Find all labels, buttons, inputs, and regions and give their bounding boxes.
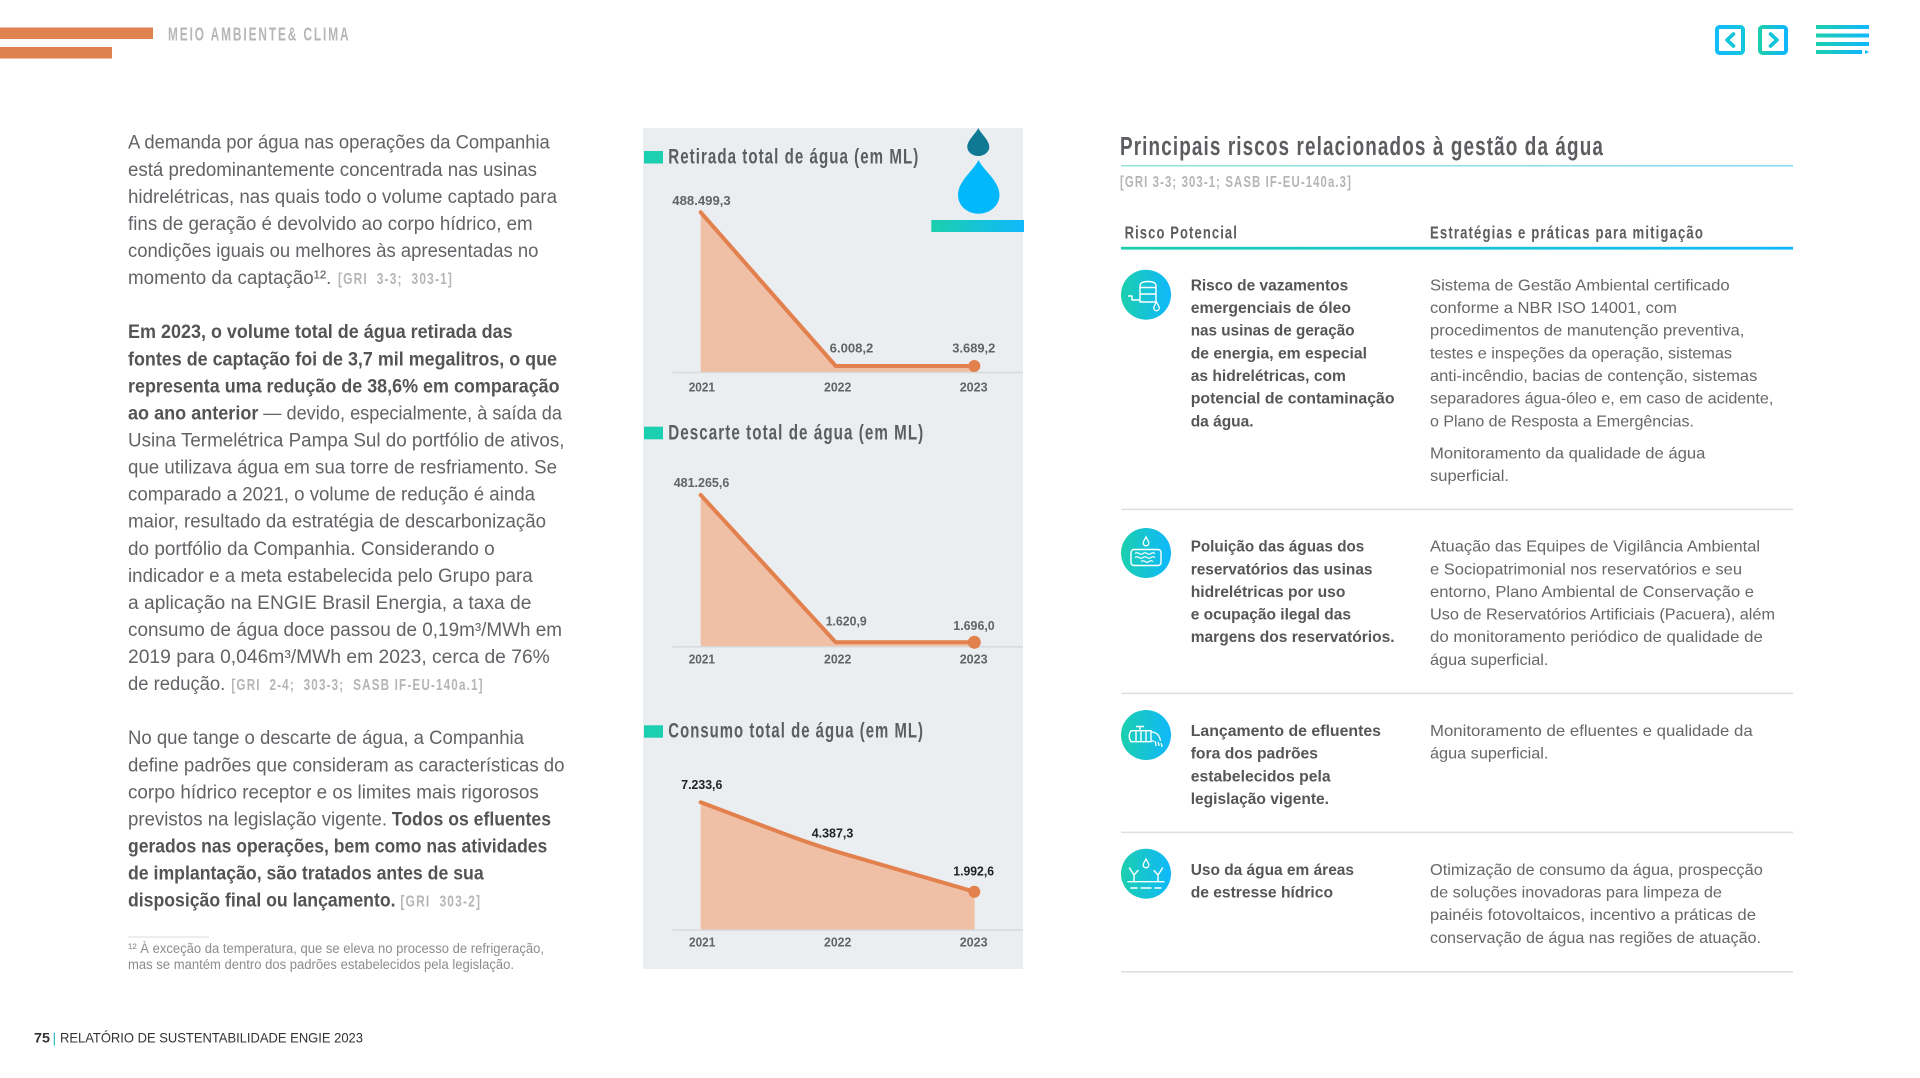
table row: vazamentos: procedimentos de manutenção preventiva,	[1430, 323, 1744, 340]
chart: descarte total de água: 481.265,6	[674, 475, 729, 490]
table row: estresse hídrico	[1121, 849, 1763, 947]
paragraph 2: [GRI 2-4; 303-3; SASB IF-EU-140a.1]	[231, 677, 484, 694]
table row: estresse hídrico: painéis fotovoltaicos, incentivo a práticas de	[1430, 907, 1756, 924]
chart: descarte total de água: 1.696,0	[953, 618, 995, 633]
paragraph 1: condições iguais ou melhores às apresentadas no	[128, 241, 538, 262]
paragraph 2: que utilizava água em sua torre de resfriamento. Se	[128, 458, 557, 478]
chart: descarte total de água: 1.620,9	[826, 614, 867, 629]
icon: polluted reservoir	[1121, 528, 1171, 578]
table row: poluição: e Sociopatrimonial nos reservatórios e seu	[1430, 561, 1742, 578]
table row: poluição: Atuação das Equipes de Vigilância Ambiental	[1430, 539, 1760, 556]
paragraph 3: gerados nas operações, bem como nas atividades	[128, 836, 547, 858]
paragraph 1: fins de geração é devolvido ao corpo hídrico, em	[128, 214, 533, 235]
chart: consumo total de água: Consumo total de água (em ML)	[668, 719, 924, 743]
paragraph 1: hidrelétricas, nas quais todo o volume captado para	[128, 187, 557, 208]
page footer: RELATÓRIO DE SUSTENTABILIDADE ENGIE 2023	[60, 1030, 363, 1046]
table row: vazamentos	[1121, 270, 1773, 485]
paragraph 2: consumo de água doce passou de 0,19m³/MWh em	[128, 620, 562, 641]
paragraph 2: do portfólio da Companhia. Considerando o	[128, 539, 495, 560]
table row: vazamentos: anti-incêndio, bacias de contenção, sistemas	[1430, 368, 1757, 385]
chart: consumo total de água: 2022	[824, 935, 851, 950]
table row: poluição: do monitoramento periódico de qualidade de	[1430, 629, 1763, 646]
paragraph 1: [GRI 3-3; 303-1]	[338, 271, 453, 288]
paragraph 3: [GRI 303-2]	[400, 894, 481, 911]
chart: consumo total de água: 2021	[689, 935, 715, 950]
chart: consumo total de água: 7.233,6	[681, 777, 722, 792]
paragraph 3: define padrões que consideram as características do	[128, 755, 564, 776]
paragraph 2: comparado a 2021, o volume de redução é ainda	[128, 485, 535, 506]
footnote: mas se mantém dentro dos padrões estabelecidos pela legislação.	[128, 957, 514, 972]
paragraph 2: ao ano anterior	[128, 403, 259, 424]
paragraph 3: No que tange o descarte de água, a Companhia	[128, 728, 524, 749]
table header: Estratégias e práticas para mitigação	[1430, 222, 1704, 242]
table row: efluentes	[1121, 710, 1753, 808]
table row: poluição: Poluição das águas dos	[1191, 539, 1364, 556]
table row: poluição: margens dos reservatórios.	[1191, 629, 1395, 646]
table row: estresse hídrico: Otimização de consumo da água, prospecção	[1430, 862, 1763, 879]
chart: retirada total de água: 2022	[824, 379, 851, 394]
page footer: 75	[34, 1030, 50, 1046]
table row: vazamentos: de energia, em especial	[1191, 345, 1367, 362]
icon: oil tank	[1121, 270, 1171, 320]
chart: retirada total de água	[644, 144, 1023, 394]
table row: estresse hídrico: de estresse hídrico	[1191, 885, 1333, 902]
paragraph 3: previstos na legislação vigente.	[128, 810, 387, 830]
table header: Risco Potencial	[1125, 222, 1238, 242]
chart: descarte total de água: Descarte total de água (em ML)	[668, 420, 924, 444]
chart: retirada total de água: 6.008,2	[830, 340, 873, 355]
table row: vazamentos: Sistema de Gestão Ambiental certificado	[1430, 277, 1730, 294]
icon: previous page button	[1717, 27, 1743, 53]
chart: retirada total de água: 2023	[960, 379, 988, 394]
table row: estresse hídrico: Uso da água em áreas	[1191, 862, 1354, 879]
table row: poluição: e ocupação ilegal das	[1191, 607, 1351, 624]
paragraph 3: de implantação, são tratados antes de sua	[128, 864, 484, 885]
table row: poluição: Uso de Reservatórios Artificiais (Pacuera), além	[1430, 607, 1775, 624]
chart: retirada total de água: 3.689,2	[952, 340, 995, 355]
paragraph 3: Todos os efluentes	[392, 810, 551, 830]
table row: estresse hídrico: conservação de água nas regiões de atuação.	[1430, 930, 1761, 947]
page footer: |	[52, 1030, 56, 1046]
paragraph 2: indicador e a meta estabelecida pelo Grupo para	[128, 566, 533, 587]
paragraph 1: momento da captação¹².	[128, 268, 331, 289]
paragraph 3: disposição final ou lançamento.	[128, 891, 396, 912]
table row: efluentes: Monitoramento de efluentes e qualidade da	[1430, 723, 1753, 740]
table header	[1121, 222, 1793, 250]
icon: water drops	[931, 128, 1024, 232]
table row: estresse hídrico: de soluções inovadoras para limpeza de	[1430, 885, 1722, 902]
chart: retirada total de água: 2021	[689, 379, 715, 394]
chart: descarte total de água: 2022	[824, 651, 851, 666]
chart: retirada total de água: 488.499,3	[672, 193, 731, 208]
paragraph 2: a aplicação na ENGIE Brasil Energia, a taxa de	[128, 593, 531, 614]
paragraph 2: Em 2023, o volume total de água retirada das	[128, 322, 513, 343]
table row: efluentes: fora dos padrões	[1191, 746, 1318, 763]
table row: vazamentos: emergenciais de óleo	[1191, 300, 1351, 317]
table row: vazamentos: separadores água-óleo e, em caso de acidente,	[1430, 391, 1773, 408]
table row: vazamentos: da água.	[1191, 413, 1254, 430]
table row: vazamentos: testes e inspeções da operação, sistemas	[1430, 345, 1732, 362]
table row: poluição: entorno, Plano Ambiental de Conservação e	[1430, 584, 1754, 601]
header accent bars	[0, 28, 153, 58]
paragraph 2: 2019 para 0,046m³/MWh em 2023, cerca de 76%	[128, 647, 550, 668]
chart: consumo total de água	[644, 719, 1023, 950]
chart: descarte total de água: 2023	[960, 651, 988, 666]
footnote: ¹² À exceção da temperatura, que se eleva no processo de refrigeração,	[128, 941, 544, 956]
icon: next page button	[1760, 27, 1786, 53]
chart: consumo total de água: 1.992,6	[953, 864, 994, 879]
paragraph 1	[128, 133, 557, 289]
chart: retirada total de água: Retirada total de água (em ML)	[668, 144, 919, 168]
chart: consumo total de água: 4.387,3	[812, 825, 853, 840]
paragraph 2: de redução.	[128, 674, 225, 695]
table row: efluentes: estabelecidos pela	[1191, 768, 1331, 785]
paragraph 2: — devido, especialmente, à saída da	[263, 403, 562, 424]
section label: MEIO AMBIENTE& CLIMA	[168, 24, 350, 44]
table row: vazamentos: o Plano de Resposta a Emergências.	[1430, 413, 1694, 430]
heading: principais riscos: [GRI 3-3; 303-1; SASB IF-EU-140a.3]	[1120, 174, 1352, 191]
paragraph 1: A demanda por água nas operações da Companhia	[128, 133, 550, 154]
table row: vazamentos: conforme a NBR ISO 14001, com	[1430, 300, 1677, 317]
paragraph 1: está predominantemente concentrada nas usinas	[128, 160, 537, 181]
table row: poluição	[1121, 528, 1775, 669]
icon: effluent pipe	[1121, 710, 1171, 760]
table row: vazamentos: Monitoramento da qualidade de água	[1430, 445, 1705, 462]
paragraph 3	[128, 728, 564, 912]
paragraph 3: corpo hídrico receptor e os limites mais rigorosos	[128, 782, 539, 803]
table row: vazamentos: as hidrelétricas, com	[1191, 368, 1346, 385]
table row: vazamentos: Risco de vazamentos	[1191, 277, 1348, 294]
panel: water charts	[643, 128, 1024, 969]
paragraph 2: maior, resultado da estratégia de descarbonização	[128, 512, 546, 533]
paragraph 2: Usina Termelétrica Pampa Sul do portfólio de ativos,	[128, 430, 564, 452]
body text column	[128, 133, 564, 912]
footnote	[128, 936, 544, 972]
icon: plants and drop	[1121, 849, 1171, 899]
table row: efluentes: legislação vigente.	[1191, 791, 1329, 808]
table row: vazamentos: potencial de contaminação	[1191, 391, 1395, 408]
table row: poluição: reservatórios das usinas	[1191, 561, 1373, 578]
table row: vazamentos: superficial.	[1430, 468, 1509, 485]
table row: vazamentos: nas usinas de geração	[1191, 323, 1355, 340]
paragraph 2: fontes de captação foi de 3,7 mil megalitros, o que	[128, 349, 557, 370]
table row: poluição: água superficial.	[1430, 652, 1548, 669]
paragraph 2	[128, 322, 564, 695]
chart: descarte total de água: 2021	[689, 651, 715, 666]
table row: efluentes: água superficial.	[1430, 746, 1548, 763]
heading: principais riscos: Principais riscos relacionados à gestão da água	[1120, 133, 1604, 161]
table row: efluentes: Lançamento de efluentes	[1191, 723, 1381, 740]
heading: principais riscos	[1120, 133, 1793, 191]
chart: consumo total de água: 2023	[960, 935, 988, 950]
icon: menu	[1816, 25, 1869, 54]
paragraph 2: representa uma redução de 38,6% em comparação	[128, 376, 560, 397]
table row: poluição: hidrelétricas por uso	[1191, 584, 1346, 601]
chart: descarte total de água	[644, 420, 1023, 666]
